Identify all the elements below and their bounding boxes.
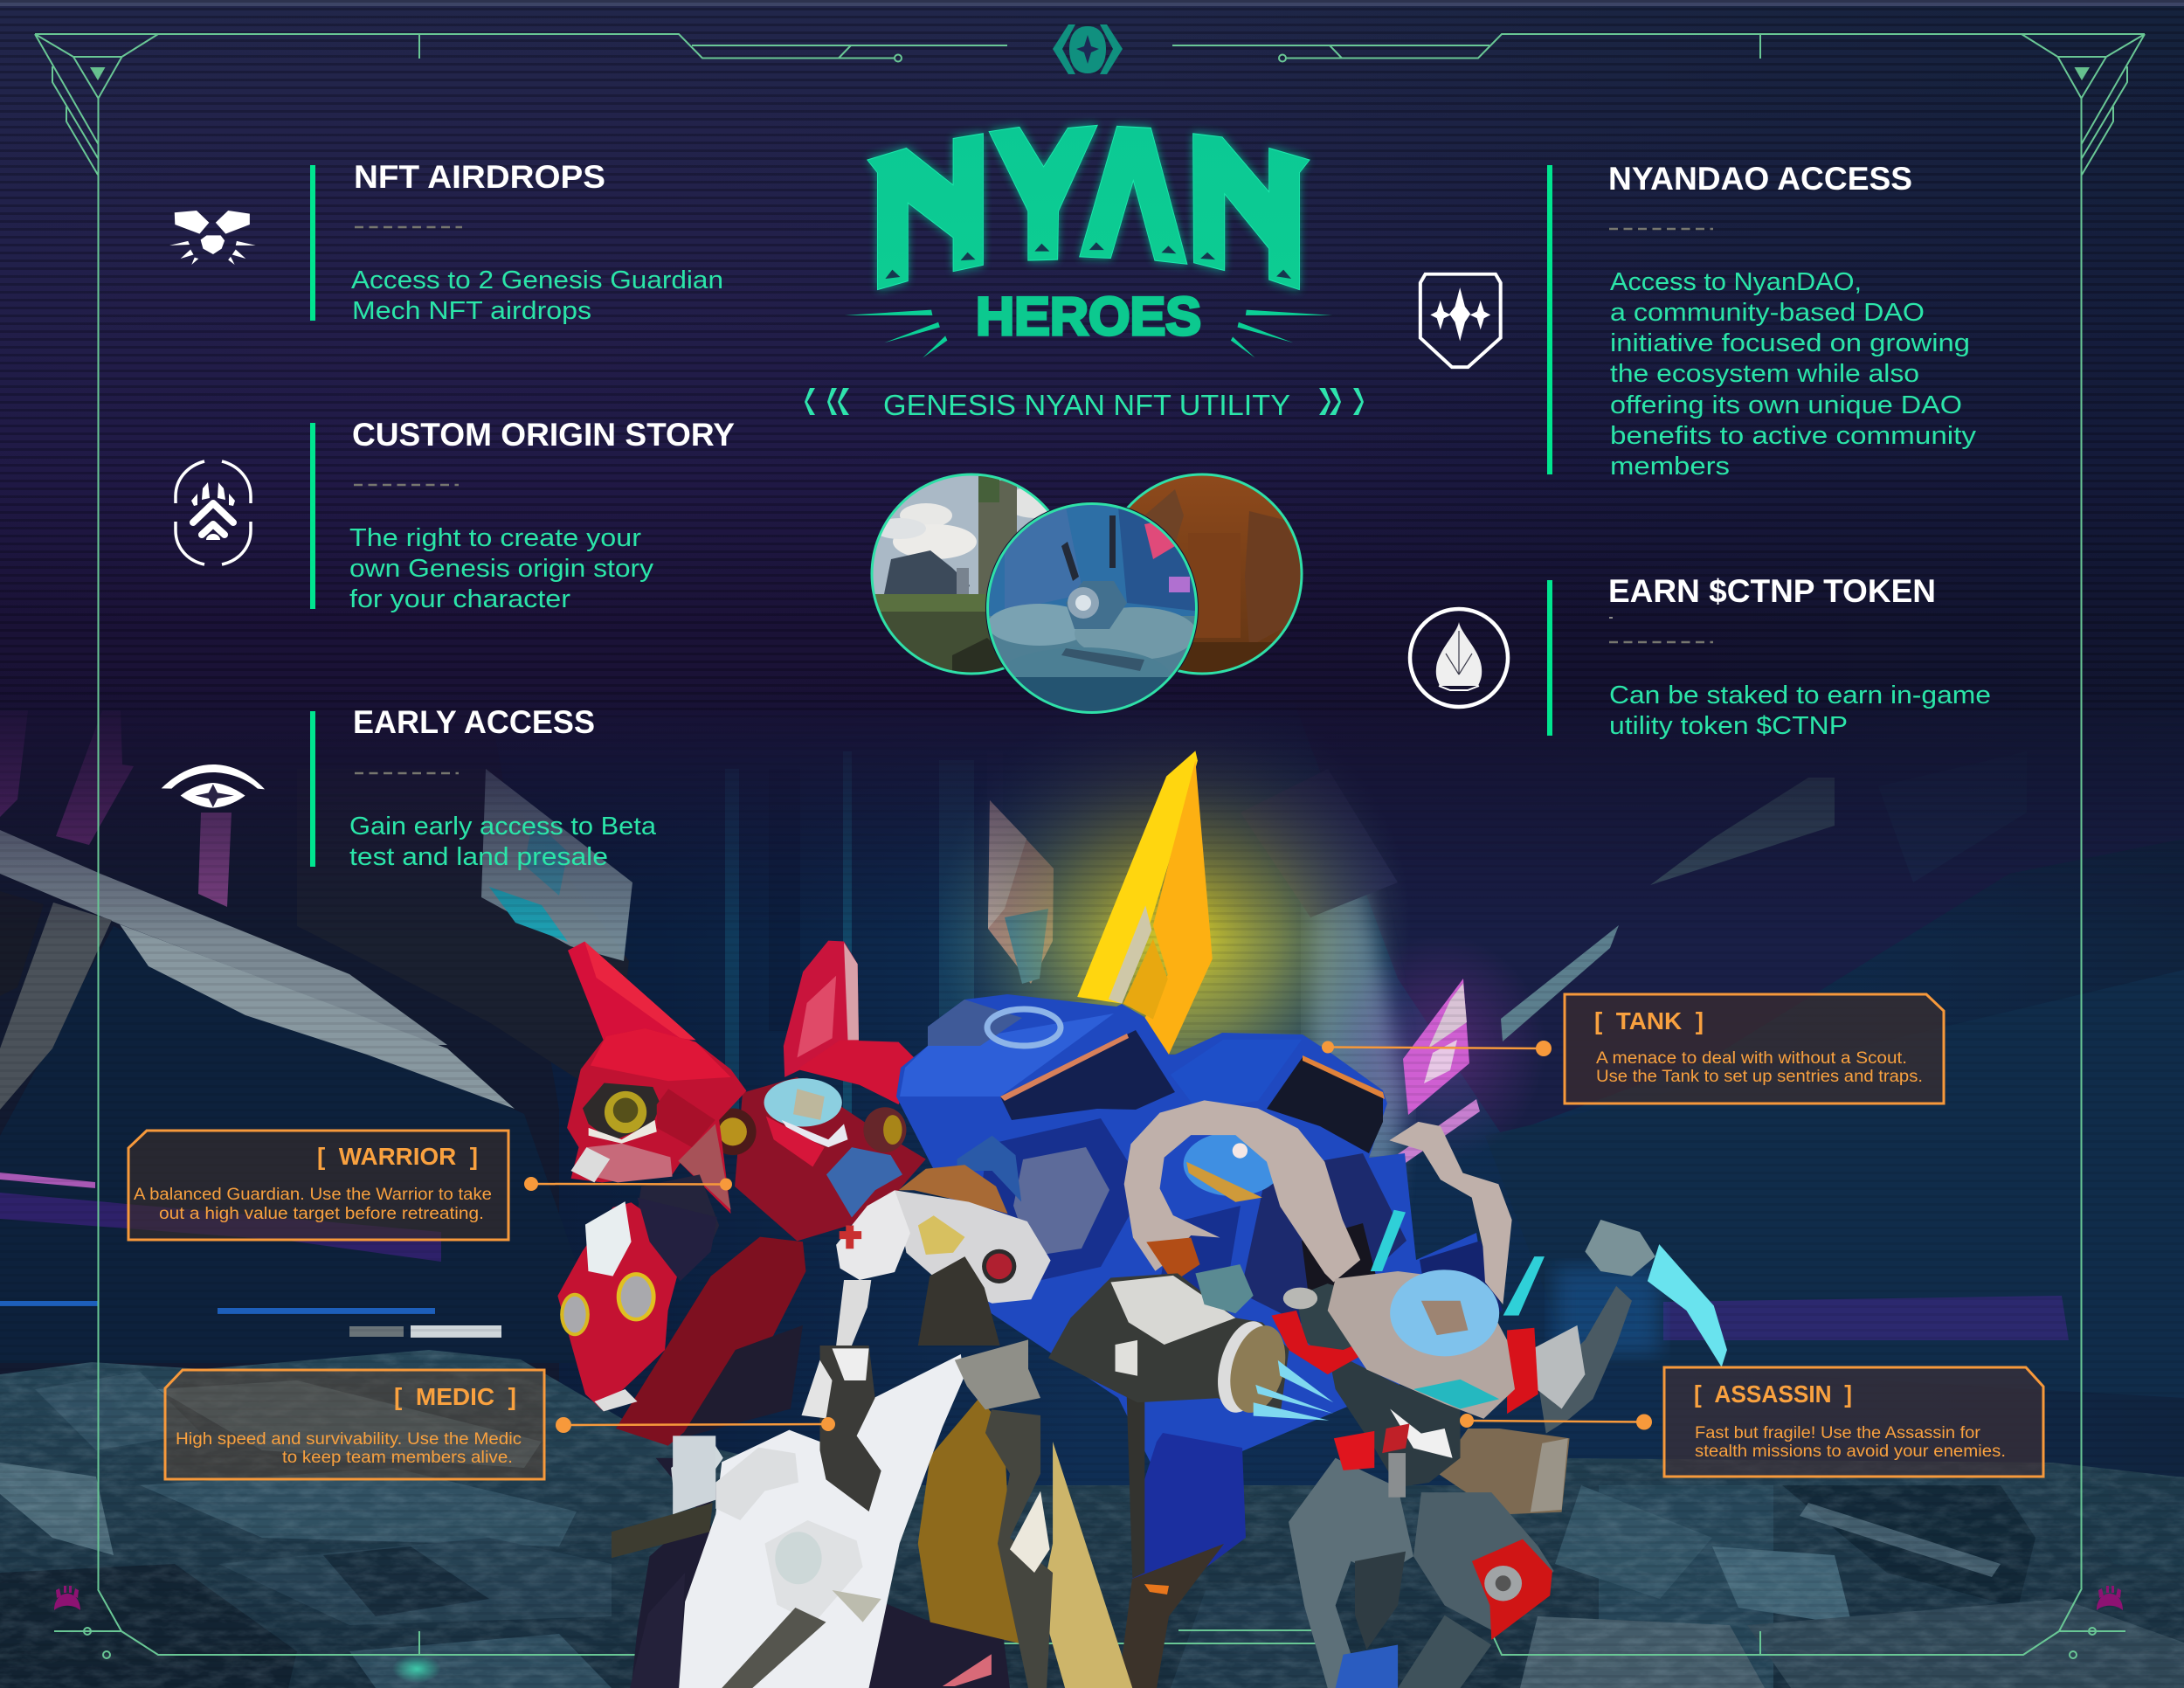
body text: Mech NFT airdrops: [352, 297, 591, 325]
right chevrons: [1319, 388, 1364, 415]
streaks: [725, 778, 739, 1110]
panel: custom origin story: [176, 417, 735, 613]
frame: bottom lines: [54, 1588, 2125, 1658]
character: red warrior mech: [557, 941, 926, 1688]
description: to keep team members alive.: [282, 1449, 513, 1467]
body text: members: [1610, 453, 1730, 481]
background: ruined cyberpunk city scene: [0, 664, 2184, 1688]
icon: paw right: [2097, 1586, 2123, 1610]
pink sign: [1365, 952, 1530, 1145]
assassin body: [1271, 1210, 1727, 1688]
panel: early access: [162, 704, 657, 871]
body text: for your character: [349, 585, 570, 613]
frame: top-left corner and top lines: [35, 34, 1007, 1589]
callout: tank: [1322, 994, 1944, 1103]
accent bar: [310, 423, 315, 609]
heading: NYANDAO ACCESS: [1608, 161, 1912, 197]
connector: [1460, 1414, 1652, 1429]
panel: NyanDAO access: [1420, 161, 1977, 481]
body text: Access to 2 Genesis Guardian: [351, 266, 723, 294]
callout: warrior: [128, 1131, 732, 1240]
title: [ WARRIOR ]: [317, 1143, 478, 1170]
callout: assassin: [1460, 1367, 2043, 1477]
description: High speed and survivability. Use the Medic: [176, 1430, 522, 1449]
logo rays: [845, 310, 1332, 358]
description: Fast but fragile! Use the Assassin for: [1695, 1424, 1981, 1442]
body text: [1609, 681, 1991, 740]
connector: [524, 1177, 732, 1191]
description: out a high value target before retreating.: [159, 1205, 484, 1223]
title: [ MEDIC ]: [394, 1383, 516, 1410]
logo word: NYAN: [867, 125, 1310, 290]
ground: [0, 1350, 2184, 1688]
description: A menace to deal with without a Scout.: [1596, 1049, 1907, 1068]
neon bars: [0, 1173, 95, 1188]
medic helmet and tanks: [826, 1136, 1051, 1346]
left chevrons: [805, 388, 849, 415]
heading: EARN $CTNP TOKEN: [1608, 573, 1936, 609]
accent bar: [1547, 165, 1552, 474]
heading: EARLY ACCESS: [353, 704, 595, 740]
box: [128, 1131, 508, 1240]
panel: earn CTNP token: [1410, 573, 1991, 740]
icon: paw shield: [176, 461, 251, 564]
accent bar: [310, 711, 315, 867]
character: yellow blade: [1077, 751, 1213, 1055]
gatling arm: [1048, 1264, 1334, 1421]
logo word: HEROES: HEROES: [976, 287, 1201, 346]
accent bar: [1547, 580, 1552, 736]
description: [176, 1430, 522, 1467]
accent bar: [310, 165, 315, 321]
title: [ TANK ]: [1594, 1007, 1704, 1034]
character: medic with cape and shield: [612, 1136, 1334, 1688]
connector: [556, 1417, 835, 1433]
gray blades: [0, 830, 447, 1045]
icon: eye: [162, 764, 265, 808]
body text: the ecosystem while also: [1610, 360, 1919, 388]
image: left circle scene (overgrown city): [870, 474, 1050, 675]
description: A balanced Guardian. Use the Warrior to take: [134, 1186, 492, 1204]
body text: [1610, 268, 1977, 481]
body text: Gain early access to Beta: [349, 813, 657, 841]
body text: Can be staked to earn in-game: [1609, 681, 1991, 709]
body text: benefits to active community: [1610, 422, 1977, 450]
description: Use the Tank to set up sentries and traps.: [1596, 1068, 1923, 1086]
body text: utility token $CTNP: [1609, 712, 1848, 740]
title: [ ASSASSIN ]: [1694, 1380, 1852, 1408]
banner: [988, 800, 1054, 984]
box: [1664, 1367, 2043, 1477]
body text: offering its own unique DAO: [1610, 391, 1962, 419]
body text: Access to NyanDAO,: [1610, 268, 1862, 296]
purple neon left: [0, 710, 28, 817]
body text: initiative focused on growing: [1610, 329, 1970, 357]
connector: [1322, 1041, 1552, 1056]
icon: paw left: [54, 1586, 80, 1610]
frame: top-right corner and top lines: [1172, 34, 2145, 1588]
body text: The right to create your: [349, 524, 641, 552]
body text: [349, 524, 654, 613]
icon: top centre emblem: [1053, 24, 1123, 74]
yellow glow: [959, 750, 1396, 1055]
subtitle text: GENESIS NYAN NFT UTILITY: [883, 389, 1290, 421]
box: [1565, 994, 1944, 1103]
description: [1596, 1049, 1923, 1086]
image: centre circle scene (flying cat): [983, 502, 1201, 716]
body text: own Genesis origin story: [349, 555, 654, 583]
body text: [349, 813, 657, 871]
description: [1695, 1424, 2006, 1461]
teal glow spot: [392, 1655, 441, 1683]
body text: test and land presale: [349, 843, 608, 871]
character: assassin with scarf: [1124, 1100, 1727, 1688]
icon: token drop: [1410, 609, 1508, 707]
box: [165, 1370, 544, 1479]
description: [134, 1186, 492, 1223]
character: blue tank mech: [896, 994, 1503, 1688]
icon: shield stars: [1420, 274, 1501, 367]
panel: NFT airdrops: [169, 159, 723, 325]
body text: a community-based DAO: [1610, 299, 1925, 327]
logo: NYAN HEROES: [845, 125, 1332, 358]
icon: airdrop: [169, 211, 256, 265]
body text: [351, 266, 723, 325]
callout: medic: [165, 1370, 835, 1479]
heading: CUSTOM ORIGIN STORY: [352, 417, 735, 453]
heading: NFT AIRDROPS: [354, 159, 605, 195]
scarf: [1124, 1100, 1512, 1304]
gray strips right: [1501, 925, 1619, 1041]
screen billboard: [481, 769, 632, 961]
description: stealth missions to avoid your enemies.: [1695, 1442, 2006, 1461]
image: right circle scene (rust ruins): [1127, 474, 1303, 675]
subtitle: Genesis Nyan NFT Utility: [805, 388, 1364, 421]
